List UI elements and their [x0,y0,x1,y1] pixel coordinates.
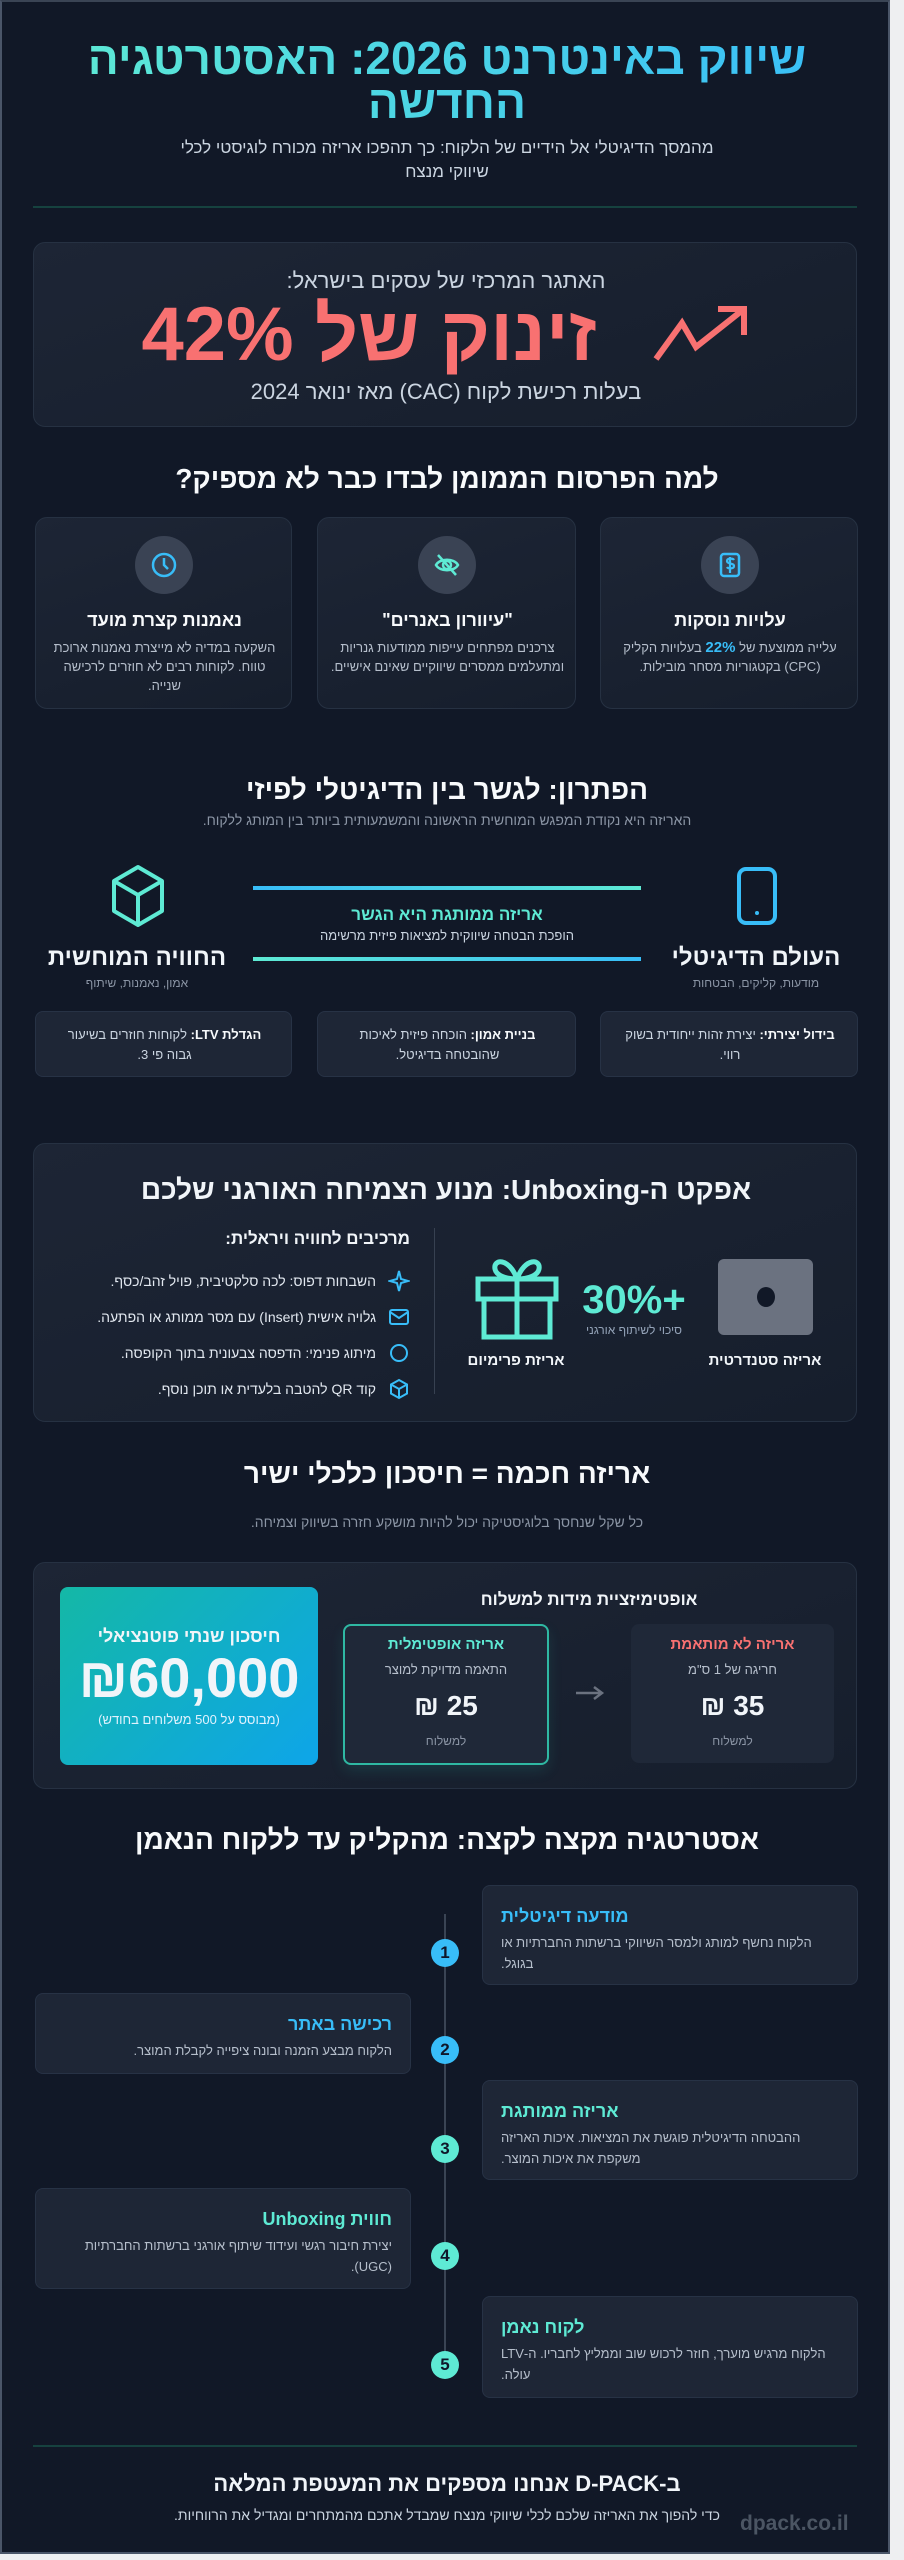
bridge label: אריזה ממותגת היא הגשר [351,905,543,924]
optimization heading: אופטימיזציית מידות למשלוח [481,1590,697,1609]
heading: why paid ads: למה הפרסום הממומן לבדו כבר לא מספיק? [175,463,719,494]
bridge diagram [48,865,840,990]
box: optimal packaging: אריזה אופטימלית [388,1636,504,1653]
step 4 [431,2242,459,2270]
tangible experience label: אמון, נאמנות, שיתוף [86,976,188,990]
step card: loyal customer [482,2296,858,2398]
step card: loyal customer: לקוח נאמן [501,2317,584,2337]
box: unfitted packaging: חריגה של 1 ס"מ [688,1662,777,1677]
step card: loyal customer: הלקוח מרגיש מוערך, חוזר לרכוש שוב וממליץ לחבריו. ה-‏LTV עולה. [501,2346,826,2382]
solution subtitle: האריזה היא נקודת המפגש המוחשית הראשונה והמשמעותית ביותר בין המותג ללקוח. [203,812,691,828]
panel: key challenge stat [33,242,857,427]
box: unfitted packaging: 35 ₪ [701,1690,764,1721]
tangible experience label: החוויה המוחשית [48,944,226,971]
benefit card: LTV: הגדלת LTV: לקוחות חוזרים בשיעור גבוה פי 3. [68,1027,261,1062]
box: optimal packaging: למשלוח [426,1734,466,1748]
icon: cube [112,865,164,927]
step 2: 2 [440,2040,450,2059]
big stat: זינוק של 42% [141,292,597,377]
benefit card: creative differentiation [600,1011,858,1077]
footer text: כדי להפוך את האריזה שלכם לכלי שיווקי מנצח שמבדל אתכם מהמתחרים ומגדיל את הרווחיות. [174,2507,720,2523]
item: insert: גלויה אישית (Insert) עם מסר ממותג או הפתעה. [97,1309,376,1325]
panel: short-lived loyalty [35,517,292,709]
digital world label: העולם הדיגיטלי [672,944,840,971]
bridge label [320,905,574,943]
digital world label: מודעות, קליקים, הבטחות [693,976,819,990]
step card: branded packaging [482,2080,858,2180]
icon: eye off [418,536,476,594]
step 3 [431,2135,459,2163]
panel: short-lived loyalty: השקעה במדיה לא מייצרת נאמנות ארוכת טווח. לקוחות רבים לא חוזרים לרכישה שנייה. [54,640,275,693]
icon: gift [476,1259,558,1340]
panel: savings [33,1562,857,1789]
box: optimal packaging: 25 ₪ [414,1690,478,1721]
subtitle: מהמסך הדיגיטלי אל הידיים של הלקוח: כך תהפכו אריזה מכורח לוגיסטי לכלי שיווקי מנצח [180,138,714,181]
panel: rising costs: עלייה ממוצעת של 22% בעלויות הקליק (CPC) בקטגוריות מסחר מובילות. [623,639,837,674]
panel: rising costs [600,517,858,709]
heading: solution: הפתרון: לגשר בין הדיגיטלי לפיזי [246,774,648,805]
item: QR code [158,1378,408,1400]
step card: site purchase: רכישה באתר [288,2014,392,2034]
box: annual savings: חיסכון שנתי פוטנציאלי [98,1626,280,1646]
stat 30%: סיכוי לשיתוף אורגני [586,1323,682,1337]
step card: site purchase [35,1993,411,2074]
box: optimal packaging: התאמה מדויקת למוצר [385,1662,507,1677]
stat lead text: האתגר המרכזי של עסקים בישראל: [287,268,605,293]
panel: banner blindness: "עיוורון באנרים" [382,610,513,630]
panel: rising costs: עלויות נוסקות [674,610,786,630]
heading: end to end strategy: אסטרטגיה מקצה לקצה: מהקליק עד ללקוח הנאמן [135,1824,759,1855]
savings subtitle: כל שקל שנחסך בלוגיסטיקה יכול להיות מושקע חזרה בשיווק וצמיחה. [251,1514,643,1530]
icon: trending up [654,306,747,361]
box: annual savings [60,1587,318,1765]
step card: digital ad [482,1885,858,1985]
heading: smart packaging: אריזה חכמה = חיסכון כלכלי ישיר [244,1458,650,1489]
item: print finishes: השבחות דפוס: לכה סלקטיבית, פויל זהב/כסף. [110,1273,376,1289]
step card: digital ad: מודעה דיגיטלית [501,1906,629,1926]
box: annual savings: ₪60,000 [79,1646,299,1709]
step 1 [431,1939,459,1967]
stat caption: בעלות רכישת לקוח (CAC) מאז ינואר 2024 [251,379,641,404]
step card: unboxing [35,2188,411,2289]
box: unfitted packaging: אריזה לא מותאמת [671,1636,794,1653]
step 2 [431,2036,459,2064]
step card: unboxing: חווית Unboxing [263,2209,392,2229]
viral components list [97,1229,410,1400]
standard label: אריזה סטנדרטית [709,1352,821,1369]
icon: standard box [718,1259,813,1335]
watermark: dpack.co.il [740,2512,849,2535]
step 5: 5 [440,2355,450,2374]
box: unfitted packaging [631,1624,834,1763]
item: print finishes [110,1270,410,1292]
step card: branded packaging: ההבטחה הדיגיטלית פוגשת את המציאות. איכות האריזה משקפת את איכות המוצר. [501,2130,800,2166]
step card: digital ad: הלקוח נחשף למותג ולמסר השיווקי ברשתות החברתיות או בגוגל. [501,1935,812,1971]
tangible experience label [48,944,226,990]
box: annual savings: (מבוסס על 500 משלוחים בחודש) [98,1712,280,1727]
digital world label [672,944,840,990]
title: שיווק באינטרנט 2026: האסטרטגיה החדשה [88,32,806,128]
icon: phone [737,867,777,925]
bridge label: הופכת הבטחה שיווקית למציאות פיזית מרשימה [320,928,574,943]
arrow [576,1686,604,1700]
item: inner branding: מיתוג פנימי: הדפסה צבעונית בתוך הקופסה. [121,1345,376,1361]
step 1: 1 [440,1943,450,1962]
benefit card: creative differentiation: בידול יצירתי: יצירת זהות ייחודית בשוק רווי. [625,1027,835,1062]
unboxing heading: אפקט ה-Unboxing: מנוע הצמיחה האורגני שלכם [141,1174,751,1205]
step card: site purchase: הלקוח מבצע הזמנה ובונה ציפייה לקבלת המוצר. [134,2043,392,2058]
step card: unboxing: יצירת חיבור רגשי ועידוד שיתוף אורגני ברשתות החברתיות (UGC). [85,2238,392,2274]
box: optimal packaging [343,1624,549,1765]
benefit card: building trust [317,1011,576,1077]
box: unfitted packaging: למשלוח [712,1734,753,1748]
icon: clock [135,536,193,594]
stat 30%: 30%+ [582,1278,686,1322]
item: QR code: קוד QR להטבה בלעדית או תוכן נוסף. [158,1381,376,1397]
step card: branded packaging: אריזה ממותגת [501,2101,618,2121]
panel: unboxing effect [33,1143,857,1422]
panel: short-lived loyalty: נאמנות קצרת מועד [87,610,242,630]
step 4: 4 [440,2246,450,2265]
timeline [444,1914,446,2351]
footer heading: ב-D-PACK אנחנו מספקים את המעטפת המלאה [213,2471,681,2496]
panel: banner blindness [317,517,576,709]
benefit card: LTV [35,1011,292,1077]
step 5 [431,2351,459,2379]
step 3: 3 [440,2139,450,2158]
panel: banner blindness: צרכנים מפתחים עייפות ממודעות גנריות ומתעלמים ממסרים שיווקיים שאינם אישיים. [331,640,564,674]
viral components list: מרכיבים לחוויה ויראלית: [225,1229,410,1248]
benefit card: building trust: בניית אמון: הוכחה פיזית לאיכות שהובטחה בדיגיטל. [360,1027,535,1062]
icon: dollar [701,536,759,594]
premium label: אריזת פרימיום [468,1352,564,1369]
